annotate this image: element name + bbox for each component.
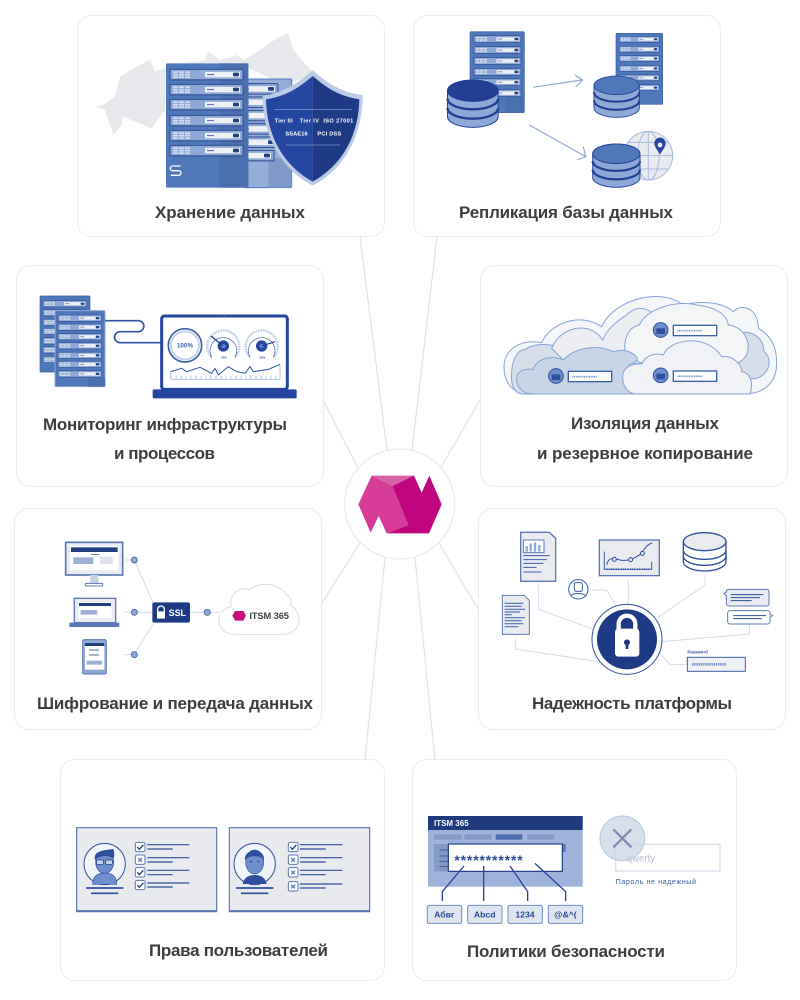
replica server <box>616 33 663 104</box>
heading: Права пользователей <box>149 941 328 960</box>
message bubble 1 <box>724 589 769 606</box>
ITSM 365 logo: ITSM 365 <box>249 611 289 621</box>
nodes <box>131 557 210 658</box>
panel: database replication <box>414 16 720 236</box>
illustration: servers with shield over map <box>97 33 363 188</box>
rule chips: @&^( <box>554 910 577 920</box>
card <box>414 16 720 236</box>
hub connection lines <box>516 577 749 665</box>
panel: isolation and backup <box>480 266 788 486</box>
replica database <box>594 76 639 117</box>
panel: encryption <box>14 508 322 730</box>
cable <box>105 321 162 343</box>
heading: Надежность платформы <box>532 694 732 713</box>
laptop <box>69 598 119 627</box>
illustration: lock hub <box>502 532 773 674</box>
profile card 1 <box>77 828 217 912</box>
100% gauge: 100% <box>177 343 193 350</box>
rule chips <box>427 905 583 923</box>
shield with certifications: SSAE16 <box>285 132 308 138</box>
blue cloud <box>517 348 637 394</box>
shield with certifications <box>263 70 363 186</box>
rule chips: Abcd <box>474 910 495 920</box>
front server <box>55 311 105 387</box>
lower cloud <box>623 341 752 394</box>
shield with certifications: ISO 27001 <box>323 118 353 124</box>
account icon and field: upper <box>653 323 717 337</box>
arrow to remote database <box>529 125 586 160</box>
rear server <box>40 296 90 372</box>
grey cloud right <box>737 332 769 380</box>
remote database <box>593 144 640 187</box>
rule chips: Абвг <box>434 910 455 920</box>
panel: security policies <box>412 760 736 980</box>
text document <box>502 595 529 634</box>
password input <box>448 844 562 871</box>
password field <box>687 649 745 671</box>
logo circle <box>345 449 455 559</box>
grey cloud left <box>511 345 580 394</box>
heading: Шифрование и передача данных <box>37 694 314 713</box>
map of Russia <box>97 33 313 135</box>
map pin <box>654 138 666 154</box>
card <box>16 266 324 486</box>
panel: platform reliability <box>478 508 786 730</box>
app window <box>428 816 583 887</box>
card <box>480 266 788 486</box>
app window: ITSM 365 <box>434 819 469 828</box>
message bubble 2 <box>728 611 773 624</box>
line chart <box>171 364 280 379</box>
rule chips: 1234 <box>515 910 535 920</box>
password input: *********** <box>454 852 523 868</box>
source database <box>447 80 498 127</box>
heading: Изоляция данных <box>571 414 720 433</box>
shield with certifications: Tier III <box>275 118 293 124</box>
heading: Хранение данных <box>155 203 306 222</box>
ITSM 365 logo <box>232 611 289 621</box>
logo mark <box>358 476 442 533</box>
laptop <box>153 316 297 398</box>
illustration: replication <box>447 32 673 187</box>
user icon <box>569 580 588 599</box>
panel: user permissions <box>60 760 384 980</box>
illustration: password policy <box>427 816 720 923</box>
chart card <box>599 540 659 576</box>
account icon and field: lower <box>653 368 717 383</box>
SSL badge <box>152 602 190 623</box>
card <box>60 760 384 980</box>
desktop monitor <box>66 542 123 586</box>
panel: monitoring <box>16 266 324 486</box>
globe <box>624 131 673 180</box>
illustration: user cards <box>77 828 370 912</box>
gauge 90%: 90% <box>221 356 227 360</box>
connection lines <box>125 560 219 655</box>
card <box>478 508 786 730</box>
weak password field: qwerty <box>627 854 655 865</box>
cloud <box>219 584 299 634</box>
profile card 2 <box>229 828 370 912</box>
illustration: monitoring <box>40 296 297 398</box>
dotted cloud middle <box>552 308 657 363</box>
heading line 2: и процессов <box>114 444 215 463</box>
card <box>78 16 384 236</box>
account icon and field: left <box>549 369 612 383</box>
arrow to replica server <box>533 75 583 87</box>
illustration: clouds <box>504 297 777 394</box>
SSL badge: SSL <box>169 608 186 618</box>
weak password message: Пароль не надежный <box>616 878 696 886</box>
gauge 90% <box>207 330 239 360</box>
password field: Password <box>687 649 708 654</box>
heading line 2: и резервное копирование <box>537 444 753 463</box>
outer cloud <box>504 297 777 394</box>
database <box>683 533 726 571</box>
tablet <box>83 640 106 674</box>
connector lines <box>322 237 480 759</box>
heading: Политики безопасности <box>467 942 665 961</box>
weak password field <box>616 844 720 871</box>
lock badge <box>592 604 662 674</box>
panel: data storage <box>78 16 384 236</box>
heading: Мониторинг инфраструктуры <box>43 415 287 434</box>
front server <box>166 63 248 188</box>
gauge 220V: 220V <box>259 356 266 360</box>
upper cloud <box>625 304 748 363</box>
central logo <box>345 449 455 559</box>
shield with certifications: Tier IV <box>300 118 319 124</box>
source server <box>470 32 524 113</box>
rule connectors <box>442 863 566 901</box>
error circle <box>600 816 645 861</box>
shield with certifications: PCI DSS <box>317 132 342 138</box>
card <box>14 508 322 730</box>
back server <box>200 79 292 188</box>
gauge 220V <box>246 330 278 360</box>
card <box>412 760 736 980</box>
document with chart <box>521 532 556 581</box>
heading: Репликация базы данных <box>459 203 674 222</box>
100% gauge <box>168 329 202 362</box>
illustration: SSL transfer <box>66 542 299 674</box>
